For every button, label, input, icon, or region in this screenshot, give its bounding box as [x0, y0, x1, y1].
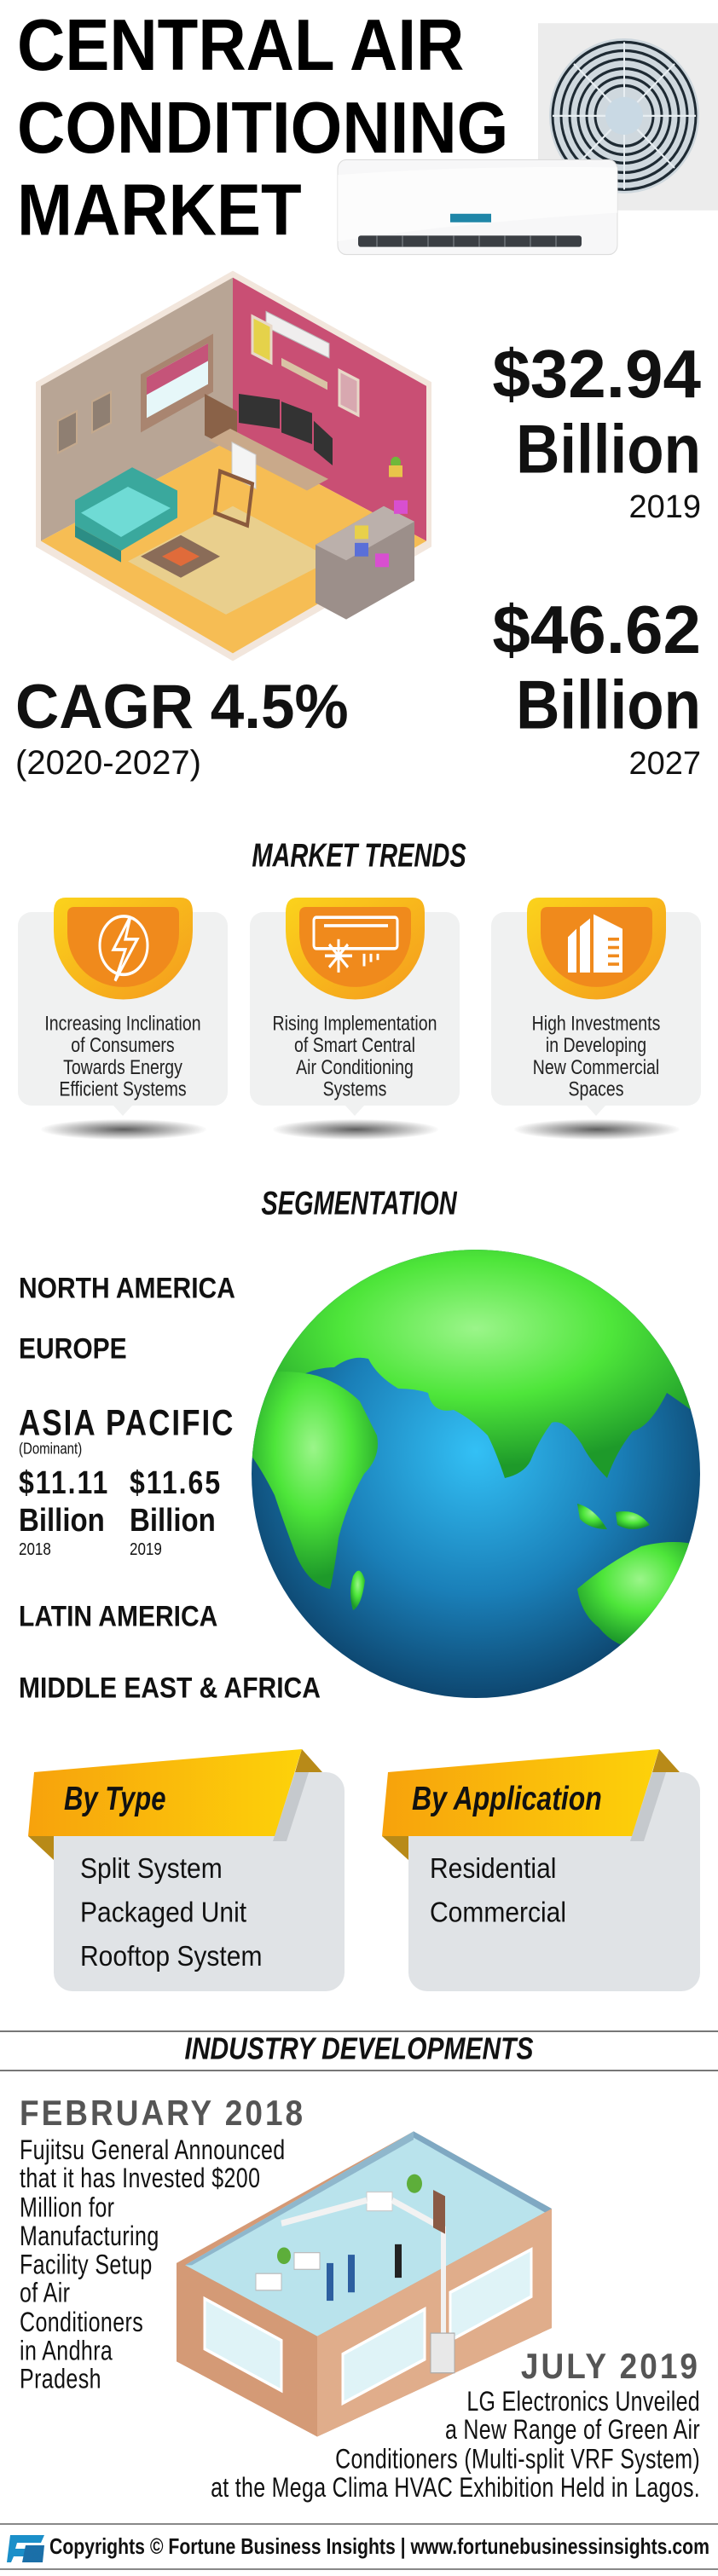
development: feb 2018: of Air [20, 2279, 70, 2309]
card: Increasing Inclination [44, 1013, 201, 1036]
illustration: isometric room [36, 271, 431, 661]
development: july 2019: JULY 2019 [521, 2347, 700, 2386]
stat: CAGR: CAGR 4.5% [15, 673, 349, 742]
stat: asia pacific 2019: Billion [130, 1502, 216, 1538]
panel: trend 1 [18, 898, 228, 1139]
development: july 2019: at the Mega Clima HVAC Exhibition Held in Lagos. [211, 2473, 700, 2504]
heading: by type: By Type [64, 1779, 165, 1817]
stat: asia pacific 2018 [19, 1464, 109, 1559]
development: feb 2018: Pradesh [20, 2365, 101, 2394]
card: New Commercial [533, 1056, 659, 1079]
illustration: outdoor AC unit [538, 23, 718, 211]
card: of Consumers [71, 1034, 175, 1057]
title: CONDITIONING [17, 86, 508, 169]
stat: asia pacific 2018: $11.11 [19, 1464, 109, 1500]
development: feb 2018: Million for [20, 2192, 114, 2223]
development: feb 2018: Facility Setup [20, 2250, 153, 2280]
label: middle east africa: MIDDLE EAST & AFRICA [19, 1672, 321, 1704]
label: asia pacific dominant: ASIA PACIFIC [19, 1403, 235, 1443]
development: july 2019: a New Range of Green Air [445, 2415, 700, 2446]
stat: asia pacific 2019: $11.65 [130, 1464, 222, 1500]
panel: by application [382, 1749, 700, 1991]
label: latin america: LATIN AMERICA [19, 1601, 217, 1632]
list: types: Rooftop System [80, 1941, 262, 1972]
card: of Smart Central [294, 1034, 415, 1057]
label: europe: EUROPE [19, 1333, 127, 1365]
development: feb 2018: Conditioners [20, 2307, 143, 2337]
stat: 2019 value: 2019 [628, 489, 701, 525]
card: Rising Implementation [273, 1013, 437, 1036]
illustration: office building [177, 2131, 552, 2436]
icon: smart AC badge [286, 898, 425, 999]
stat: 2027 value: 2027 [628, 746, 701, 782]
card [250, 912, 460, 1106]
stat: asia pacific 2018: Billion [19, 1502, 105, 1538]
illustration: indoor split AC unit [338, 159, 617, 256]
stat: CAGR [15, 673, 349, 782]
card: Spaces [568, 1077, 624, 1100]
title: MARKET [17, 169, 302, 251]
panel: by type [28, 1749, 345, 1991]
list: applications: Residential [430, 1853, 556, 1885]
heading: by application: By Application [412, 1780, 602, 1816]
stat: asia pacific 2019: 2019 [130, 1539, 162, 1559]
icon: buildings badge [527, 898, 666, 999]
development: july 2019: Conditioners (Multi-split VRF System) [335, 2444, 700, 2475]
pointer [345, 1106, 364, 1116]
stat: 2019 value [492, 336, 701, 525]
globe [252, 1250, 700, 1698]
list: types: Split System [80, 1853, 223, 1885]
stat: asia pacific 2019 [130, 1464, 222, 1559]
stat: 2019 value: $32.94 [492, 336, 701, 412]
list: types: Packaged Unit [80, 1897, 246, 1928]
stat: 2027 value: Billion [516, 667, 701, 743]
heading: segmentation: SEGMENTATION [261, 1186, 457, 1222]
card [18, 912, 228, 1106]
development: july 2019: LG Electronics Unveiled [466, 2387, 700, 2417]
development: feb 2018 [20, 2094, 305, 2394]
title [17, 3, 508, 251]
card: Air Conditioning [296, 1056, 414, 1079]
panel: trend 2 [250, 898, 460, 1139]
list: applications [430, 1853, 566, 1928]
pointer [587, 1106, 605, 1116]
label: north america: NORTH AMERICA [19, 1273, 235, 1304]
card: High Investments [532, 1013, 660, 1036]
icon: logo [7, 2535, 44, 2562]
card [491, 912, 701, 1106]
stat: 2027 value [492, 592, 701, 782]
development: july 2019 [211, 2347, 700, 2504]
heading: market trends: MARKET TRENDS [252, 838, 466, 875]
card: Systems [323, 1077, 386, 1100]
panel: trend 3 [491, 898, 701, 1139]
development: feb 2018: in Andhra [20, 2336, 113, 2366]
region list: (Dominant) [19, 1441, 82, 1458]
card: Efficient Systems [59, 1077, 187, 1100]
stat: CAGR: (2020-2027) [15, 744, 201, 782]
development: feb 2018: FEBRUARY 2018 [20, 2094, 305, 2133]
stat: asia pacific 2018: 2018 [19, 1539, 51, 1559]
region list [19, 1273, 321, 1704]
development: feb 2018: Manufacturing [20, 2221, 159, 2251]
list: types [80, 1853, 262, 1972]
heading: industry developments: INDUSTRY DEVELOPMENTS [185, 2033, 533, 2066]
card: in Developing [546, 1034, 646, 1057]
pointer [113, 1106, 132, 1116]
development: feb 2018: Fujitsu General Announced [20, 2135, 286, 2166]
card: Towards Energy [63, 1056, 182, 1079]
development: feb 2018: that it has Invested $200 [20, 2163, 260, 2194]
list: applications: Commercial [430, 1897, 566, 1928]
title: CENTRAL AIR [17, 3, 464, 86]
stat: 2019 value: Billion [516, 411, 701, 488]
icon: energy bolt badge [54, 898, 193, 999]
stat: 2027 value: $46.62 [492, 592, 701, 667]
